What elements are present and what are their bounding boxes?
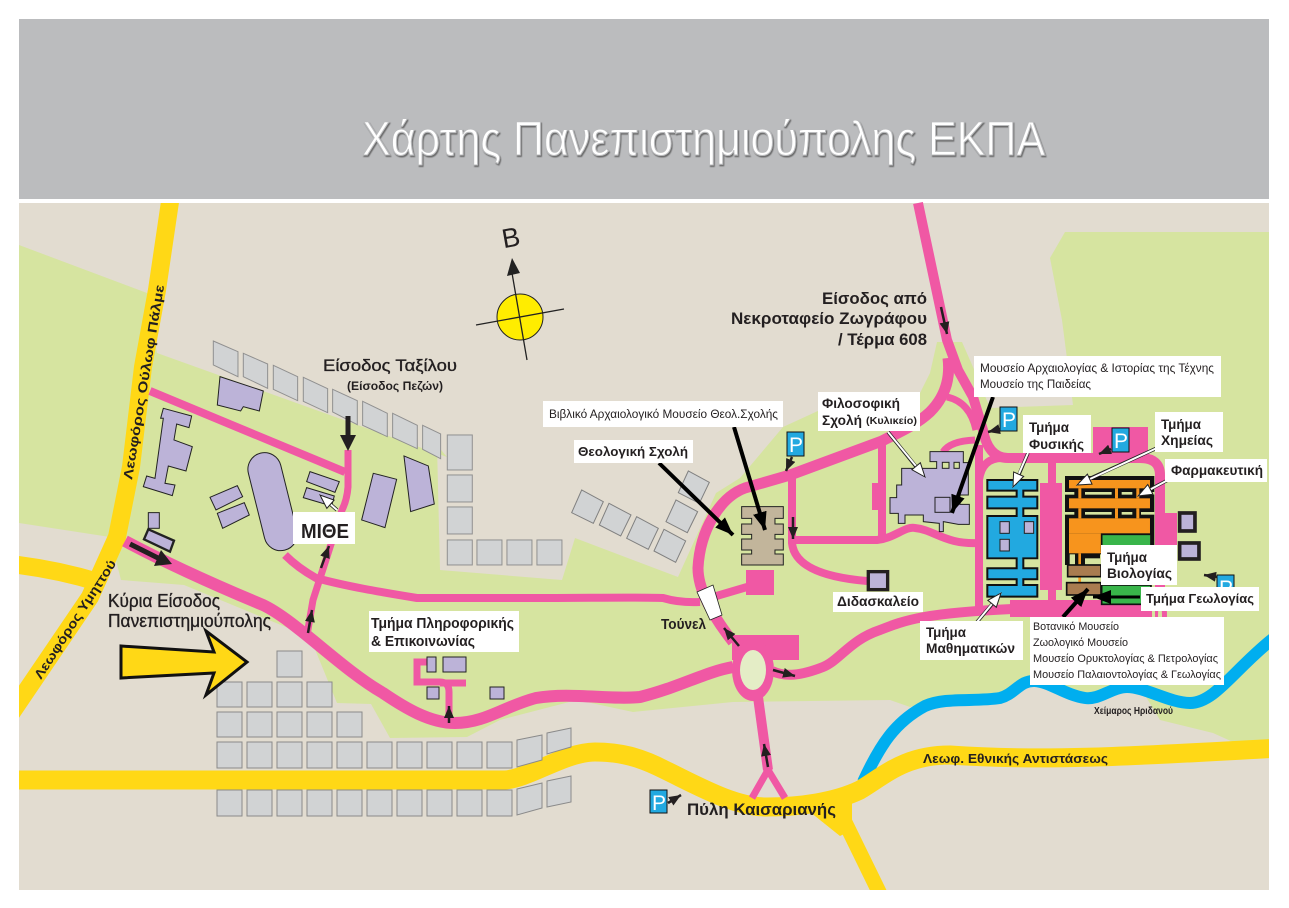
tunnel	[697, 585, 722, 620]
label: Biology: Βιολογίας	[1107, 565, 1172, 581]
road label: Ethnikis Antistaseos: Λεωφ. Εθνικής Αντιστάσεως	[923, 751, 1108, 766]
building: Theology School	[742, 507, 888, 590]
label: main entrance	[108, 591, 271, 631]
building: Chemistry, Pharmacy, Biology, Geology complex	[1065, 476, 1154, 604]
grey buildings south-west block	[217, 651, 571, 816]
building: Physics and Mathematics	[987, 480, 1037, 597]
parking letters: P	[789, 434, 803, 457]
pink campus roads	[125, 203, 1160, 798]
label: Philosophy School: (Κυλικείο)	[866, 416, 917, 427]
pink parking blocks	[732, 427, 1177, 701]
parking signs	[650, 407, 1234, 813]
label: Chemistry: Χημείας	[1161, 432, 1213, 448]
label: natural history museums	[1030, 617, 1224, 685]
label: Informatics: Τμήμα Πληροφορικής	[371, 616, 514, 632]
label: Biology	[1101, 545, 1177, 585]
label: main entrance: Πανεπιστημιούπολης	[108, 611, 271, 631]
map background	[19, 203, 1269, 890]
label: Physics	[1023, 415, 1091, 453]
big yellow entrance arrow	[121, 631, 247, 695]
building: Philosophy School	[890, 452, 969, 532]
river label: Χείμαρος Ηριδανού	[1094, 706, 1173, 717]
label: Zografou cemetery entrance	[731, 289, 927, 349]
label: Biblical museum: Βιβλικό Αρχαιολογικό Μουσείο Θεολ.Σχολής	[549, 409, 778, 421]
purple buildings west	[143, 377, 434, 554]
label: Informatics	[369, 611, 519, 652]
label: Taxilou entrance: Είσοδος Ταξίλου	[323, 356, 457, 375]
label: Mathematics	[920, 621, 1023, 660]
grey buildings centre	[572, 471, 709, 562]
label: Geology	[1141, 587, 1259, 611]
label: main entrance: Κύρια Είσοδος	[108, 591, 220, 611]
label: Theology School	[574, 440, 693, 463]
gate label: Kaisariani: Πύλη Καισαριανής	[687, 801, 836, 819]
label: Geology: Τμήμα Γεωλογίας	[1146, 591, 1254, 606]
parking letters: P	[1114, 430, 1128, 453]
road label: Olof Palme avenue: Λεωφόρος Ούλωφ Πάλμε	[120, 284, 167, 480]
parking letters	[652, 409, 1233, 815]
parking letters: P	[1219, 577, 1233, 600]
header band	[19, 19, 1269, 199]
label: Didaskaleio: Διδασκαλείο	[837, 593, 919, 609]
label: Philosophy School	[818, 392, 920, 431]
small direction arrows	[308, 307, 1217, 803]
label: Taxilou entrance: (Είσοδος Πεζών)	[347, 379, 443, 393]
label: Physics: Φυσικής	[1029, 436, 1084, 452]
label: Biology: Τμήμα	[1107, 549, 1147, 565]
roundabout island	[740, 650, 766, 690]
label: Archaeology museums: Μουσείο της Παιδείας	[980, 379, 1091, 391]
label: Mathematics: Μαθηματικών	[926, 640, 1015, 656]
east campus buildings	[890, 452, 1199, 597]
label: natural history museums: Ζωολογικό Μουσείο	[1033, 637, 1128, 649]
label: Mathematics: Τμήμα	[926, 624, 966, 640]
compass	[476, 221, 564, 360]
label: Zografou cemetery entrance: Είσοδος από	[822, 289, 927, 308]
parking letters: P	[1002, 409, 1016, 432]
label: MITHE: ΜΙΘΕ	[301, 521, 349, 543]
label: Archaeology museums	[974, 356, 1221, 397]
label: Pharmacy: Φαρμακευτική	[1171, 463, 1263, 478]
arrow: main entrance road	[130, 544, 172, 566]
grey buildings north row	[213, 341, 562, 565]
label: Zografou cemetery entrance: Νεκροταφείο Ζωγράφου	[731, 309, 927, 328]
long black pointer arrows	[659, 397, 1140, 617]
label: MITHE	[293, 512, 355, 544]
label: Archaeology museums: Μουσείο Αρχαιολογίας & Ιστορίας της Τέχνης	[980, 363, 1214, 375]
label: Biblical museum	[543, 401, 783, 427]
white pointer arrows	[320, 432, 1168, 622]
label: natural history museums: Μουσείο Παλαιοντολογίας & Γεωλογίας	[1033, 669, 1221, 681]
title: Χάρτης Πανεπιστημιούπολης ΕΚΠΑ	[362, 113, 1045, 166]
label: Taxilou entrance	[323, 356, 457, 393]
label: Chemistry: Τμήμα	[1161, 416, 1201, 432]
green areas	[19, 232, 1269, 748]
label: Philosophy School: Φιλοσοφική	[822, 396, 900, 411]
compass: Β	[500, 221, 522, 254]
river Iridanos	[863, 637, 1275, 782]
label: natural history museums: Μουσείο Ορυκτολογίας & Πετρολογίας	[1033, 653, 1218, 665]
outbuildings east	[1180, 513, 1199, 559]
arrow: Taxilou entrance	[340, 416, 356, 451]
label: Theology School: Θεολογική Σχολή	[578, 444, 688, 459]
label: Physics: Τμήμα	[1029, 419, 1069, 435]
label: tunnel: Τούνελ	[661, 617, 706, 633]
road label: Ymittou avenue: Λεωφόρος Υμηττού	[31, 556, 119, 682]
parking letters: P	[652, 792, 666, 815]
buildings: Informatics department	[427, 657, 504, 699]
label: Philosophy School: Σχολή	[822, 413, 862, 428]
label: Pharmacy	[1165, 459, 1267, 482]
label: Chemistry	[1155, 412, 1223, 452]
label: Zografou cemetery entrance: / Τέρμα 608	[838, 330, 927, 349]
label: natural history museums: Βοτανικό Μουσείο	[1033, 621, 1119, 633]
label: Informatics: & Επικοινωνίας	[371, 634, 475, 650]
yellow roads	[10, 195, 1280, 898]
